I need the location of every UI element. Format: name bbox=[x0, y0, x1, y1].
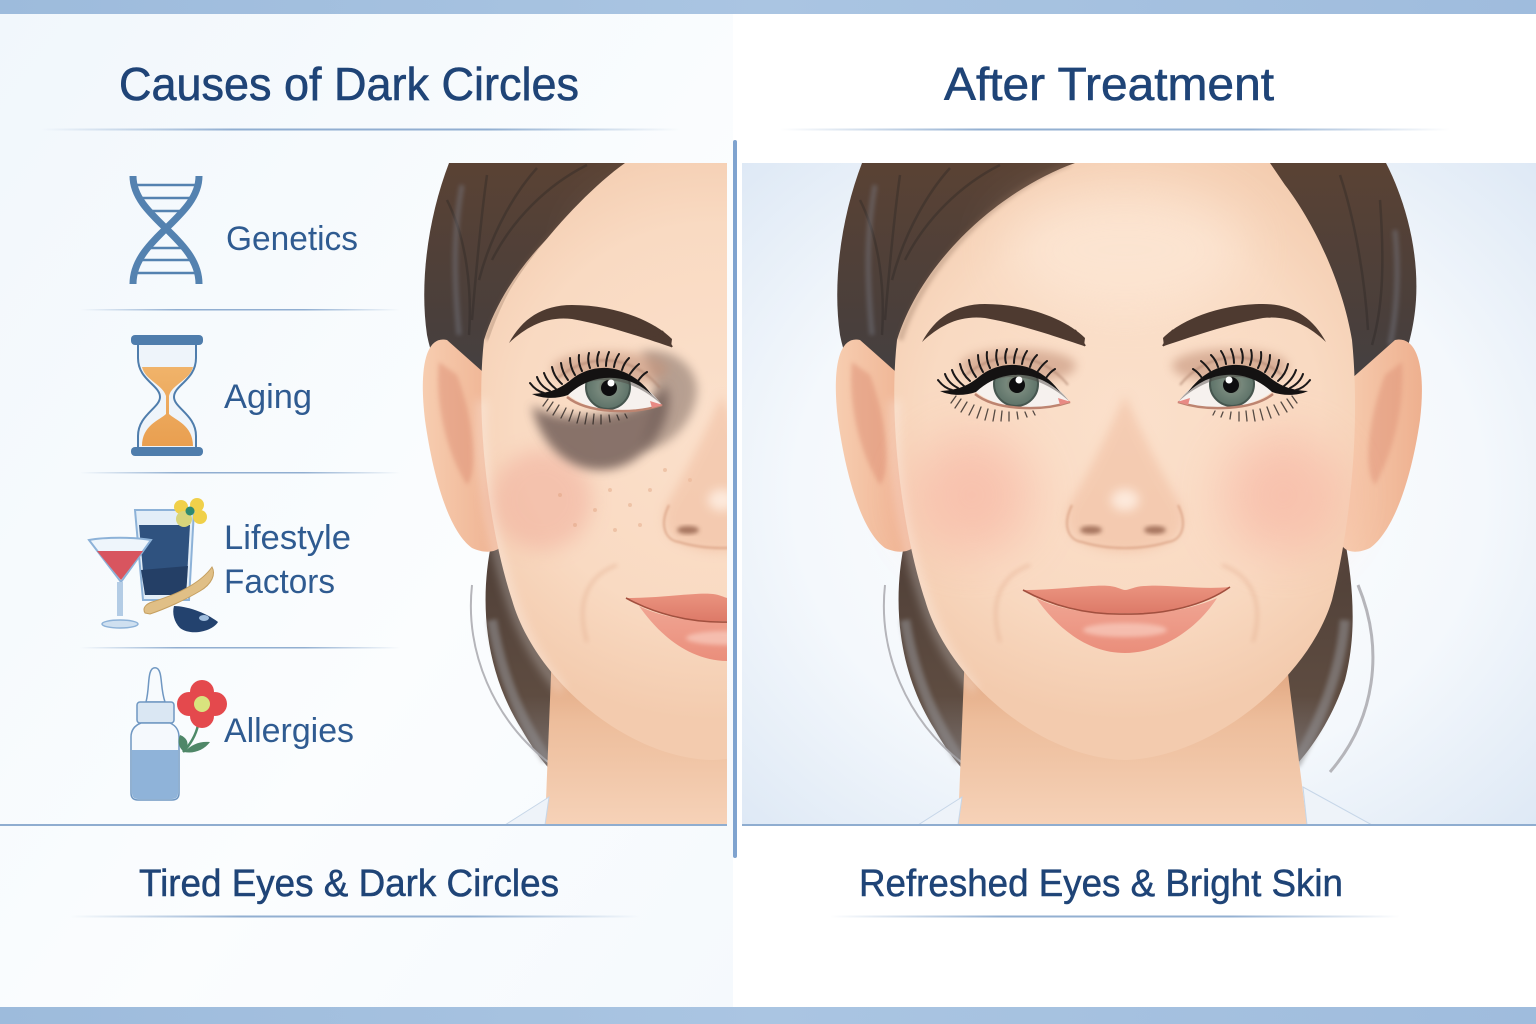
label: aging: Aging bbox=[224, 378, 312, 416]
icon: drinks and food bbox=[89, 498, 218, 632]
label: allergies: Allergies bbox=[224, 712, 354, 750]
heading: causes of dark circles: Causes of Dark Circles bbox=[119, 58, 579, 110]
label: lifestyle factors: Factors bbox=[224, 563, 335, 601]
heading: after treatment: After Treatment bbox=[944, 58, 1274, 110]
label: lifestyle factors: Lifestyle bbox=[224, 519, 351, 557]
left panel background bbox=[0, 14, 733, 1007]
icon: hourglass bbox=[131, 335, 203, 456]
caption: refreshed eyes: Refreshed Eyes & Bright Skin bbox=[859, 863, 1343, 905]
freckles bbox=[558, 468, 692, 532]
cause: aging bbox=[131, 335, 312, 456]
cause: allergies bbox=[131, 668, 354, 800]
portrait: refreshed full face bbox=[836, 163, 1422, 825]
icon: dropper bottle and flower bbox=[131, 668, 227, 800]
label: genetics: Genetics bbox=[226, 220, 358, 258]
dark circle under the eye bbox=[532, 385, 669, 470]
icon: dna helix bbox=[133, 176, 199, 284]
image baseline right bbox=[742, 824, 1536, 826]
bottom band bbox=[0, 1007, 1536, 1024]
portrait: tired half face with dark circle bbox=[422, 163, 727, 824]
caption: tired eyes: Tired Eyes & Dark Circles bbox=[139, 863, 559, 905]
cause: lifestyle factors bbox=[89, 498, 351, 632]
lighter bruise ring bbox=[640, 351, 697, 450]
image baseline left bbox=[0, 824, 727, 826]
portrait background bbox=[742, 163, 1536, 825]
top band bbox=[0, 0, 1536, 14]
panel: after treatment bbox=[742, 58, 1536, 918]
cause: genetics bbox=[133, 176, 358, 284]
panel: causes bbox=[56, 66, 727, 918]
centre divider bbox=[733, 140, 737, 858]
